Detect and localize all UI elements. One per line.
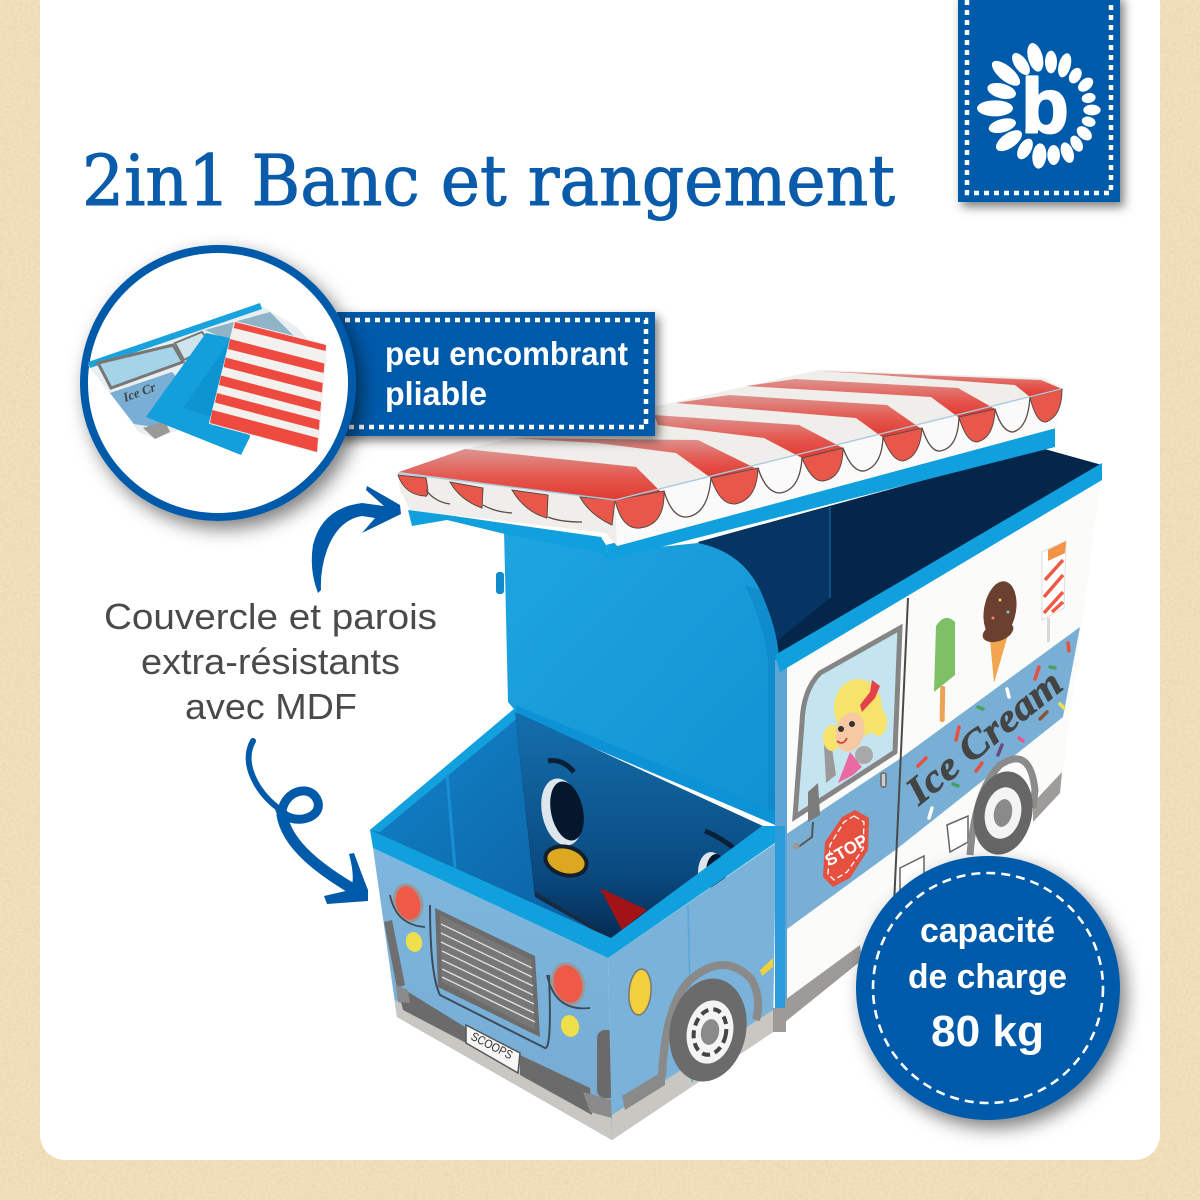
striped awning lid [398,370,1062,560]
badge text: capacité [920,912,1055,950]
printed second eye [698,831,736,892]
printed red mouth [600,888,647,930]
description text: Couvercle et parois [104,596,437,637]
striped lolly icon [1042,541,1066,642]
truck side [775,463,1102,1032]
arrow to lid [312,486,401,593]
unfolded sheet [88,303,327,440]
callout banner: peu encombrant pliable [337,312,655,436]
white scallop outlines [426,397,1030,522]
sprinkles [918,643,1069,818]
front box interior [370,708,765,945]
title: 2in1 Banc et rangement [82,140,895,222]
badge text: de charge [908,958,1067,996]
red scallops [398,389,1062,528]
licence plate: SCOOPS [469,1029,515,1062]
stop sign [822,810,871,887]
ice cream cone icon [979,579,1021,683]
lid seam [398,389,1061,500]
awning red stripes [399,371,1062,500]
text: Ice Cream: Ice Cream [897,661,1071,814]
front wheel [660,965,758,1089]
cyan seam strip between front and side [775,826,785,1008]
truck front face [373,848,622,1140]
inset circle: folded product [84,249,352,517]
product: ice cream truck storage bench [370,370,1102,1140]
stop sign: STOP [822,831,871,870]
badge text: 80 kg [931,1007,1044,1056]
unfolded sheet: Ice Cr [120,379,158,405]
badge text [908,912,1067,1056]
bumper [384,920,622,1118]
door handle and hatches [881,773,968,890]
description text [104,596,437,727]
side mirror [792,783,820,850]
banner text: pliable [385,375,487,412]
printed headlight [542,842,590,880]
flower logo: b [1021,64,1069,150]
lower skirt [785,945,862,1022]
flower logo [977,41,1101,169]
badge: load capacity [856,856,1120,1120]
cyan rim of side [775,463,1102,672]
looped arrow to front box [249,741,368,904]
blue flat panels [146,333,250,455]
bottom gray strip [395,1000,612,1140]
raised blue wall panel [496,530,783,828]
rear wheel [966,759,1062,860]
popsicle icon [934,618,955,722]
banner text: peu encombrant [385,335,628,372]
left interior wall [370,712,611,940]
storage interior, rear [698,448,1102,658]
cab window with driver [795,628,900,817]
side indicator lamp [627,968,653,1016]
description text: avec MDF [185,686,357,727]
lid white body [398,370,1062,546]
interior dark base [370,712,765,945]
cyan rim of front box [370,826,785,958]
brand logo tag [958,0,1120,202]
description text: extra-résistants [141,641,400,682]
blue band on side [783,627,1080,932]
truck right side of front box [608,843,786,1140]
right headlight and indicator [546,958,590,1039]
printed eye [535,760,589,849]
lid cyan underside [408,428,1055,560]
folded striped lid [210,322,326,452]
banner text [385,335,628,412]
radiator grille [430,905,550,1048]
left headlight and indicator [388,880,428,954]
back wall with printed face [515,712,765,942]
